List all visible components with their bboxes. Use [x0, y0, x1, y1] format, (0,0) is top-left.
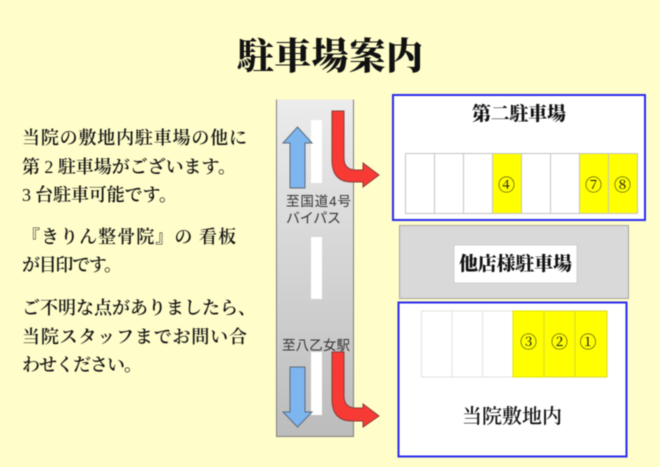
text block: intro: [22, 128, 247, 205]
arrow: blue up: [283, 127, 312, 188]
arrow: red turn to second parking: [332, 111, 379, 187]
title: 駐車場案内: [235, 36, 423, 78]
text block: contact: わせください。: [22, 355, 142, 375]
slot numbers: ④: [498, 176, 515, 195]
label: to bypass: バイパス: [286, 210, 341, 226]
label: to bypass: 至国道4号: [286, 194, 351, 209]
panel: second parking: [393, 95, 645, 220]
slot numbers: ⑦: [585, 176, 602, 195]
text block: contact: 当院スタッフまでお問い合: [22, 327, 247, 347]
text block: signboard: 『きりん整骨院』の 看板: [22, 227, 236, 247]
slot numbers: ⑧: [614, 176, 631, 195]
heading: second parking: 第二駐車場: [472, 102, 566, 125]
parking slots: [406, 154, 638, 214]
text block: contact: ご不明な点がありましたら、: [22, 298, 256, 318]
text block: intro: 3 台駐車可能です。: [22, 185, 177, 205]
slot numbers: ③: [520, 333, 537, 352]
panel: other store parking: 他店様駐車場: [459, 252, 572, 275]
text block: intro: 当院の敷地内駐車場の他に: [22, 128, 247, 148]
label: clinic grounds: 当院敷地内: [462, 405, 562, 428]
slot numbers: ②: [551, 333, 568, 352]
road: [276, 100, 354, 436]
label: to station: 至八乙女駅: [282, 338, 350, 353]
text block: signboard: [22, 227, 236, 275]
slot numbers: [498, 176, 631, 195]
text block: signboard: が目印です。: [22, 255, 122, 275]
panel: clinic parking: [398, 302, 626, 456]
slot numbers: [520, 333, 596, 352]
text block: contact: [22, 298, 256, 375]
parking slots: [422, 311, 607, 377]
arrow: blue down: [283, 367, 312, 427]
arrow: red turn to clinic parking: [332, 352, 379, 427]
label: to bypass: [286, 194, 351, 226]
panel: other store parking: [400, 226, 628, 298]
text block: intro: 第 2 駐車場がございます。: [22, 157, 236, 177]
slot numbers: ①: [580, 333, 596, 352]
